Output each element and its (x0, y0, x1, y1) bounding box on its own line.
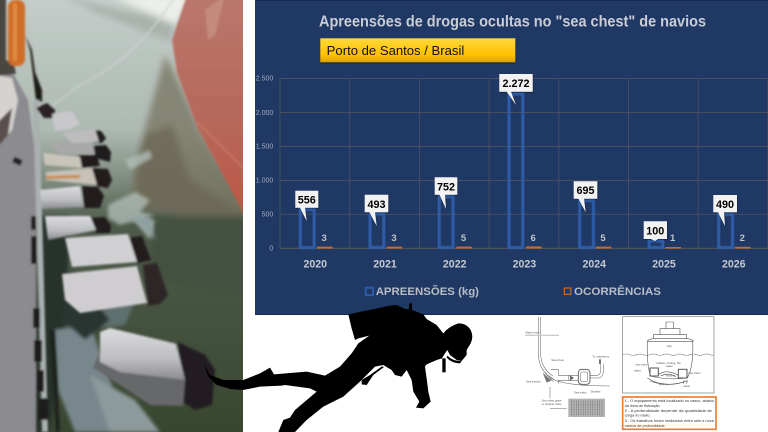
occurrence bars (317, 246, 751, 249)
location banner: Porto de Santos (320, 38, 515, 62)
callout: 100: 100 (646, 225, 664, 237)
ship cross-section diagram: sea chest (688, 371, 701, 375)
ship cross-section diagram (623, 317, 714, 393)
y axis labels: 2.000 (256, 110, 273, 117)
callout: 695 (574, 181, 597, 212)
callout: explanatory notes: da linha de flutuação. (625, 404, 661, 408)
y axis labels: 0 (269, 246, 273, 252)
ship cross-section diagram: water (666, 364, 673, 368)
x axis years: 2020 (304, 258, 327, 270)
callout: 695: 695 (576, 185, 595, 197)
occurrence value labels: 5 (461, 233, 467, 244)
legend: ocorrências: OCORRÊNCIAS (574, 285, 661, 298)
x axis years: 2023 (513, 258, 536, 270)
sea chest schematic diagram: Sea valve (574, 391, 587, 395)
x axis years: 2025 (652, 258, 676, 270)
callout: explanatory notes: 2 - A profundidade depende da quantidade de (625, 409, 712, 413)
x axis years: 2024 (583, 258, 606, 270)
x axis years: 2021 (373, 258, 397, 270)
y axis labels (256, 76, 273, 252)
y axis labels: 500 (262, 212, 273, 218)
callout: 556: 556 (298, 194, 316, 206)
sea chest schematic diagram (525, 317, 610, 417)
callout: explanatory notes: metros de profundidade. (625, 424, 666, 428)
legend: apreensões: APREENSÕES (kg) (376, 285, 479, 298)
sea chest schematic diagram: or strainer plate (542, 402, 562, 406)
seizure bars (kg) (300, 94, 732, 248)
callout: 493: 493 (367, 199, 386, 211)
callout: 752: 752 (437, 182, 455, 194)
callout: 2.272 (499, 74, 533, 105)
callout: explanatory notes: carga no navio. (625, 414, 651, 418)
ship cross-section diagram: water (634, 368, 641, 372)
chart title: Apreensões de drogas ocultas no "sea chest" de navios (319, 14, 706, 30)
sea chest schematic diagram: Sea suction (526, 379, 541, 383)
location banner: Porto de Santos: Porto de Santos / Brasil (327, 44, 464, 58)
ship cross-section diagram: strainer (666, 373, 675, 377)
occurrence value labels (322, 233, 745, 244)
diver silhouette (204, 303, 472, 432)
sea chest schematic diagram: Strainer (591, 389, 601, 393)
callout: 2.272: 2.272 (502, 78, 530, 90)
callout: 490 (713, 195, 737, 226)
callout: 556 (295, 191, 318, 221)
occurrence value labels: 5 (600, 233, 606, 244)
y axis labels: 2.500 (256, 76, 273, 82)
callout: 490: 490 (716, 199, 734, 211)
callout: explanatory notes (623, 397, 716, 429)
x axis years (304, 258, 746, 270)
x axis years: 2022 (443, 258, 467, 270)
occurrence value labels: 3 (322, 233, 327, 244)
callout: 493 (365, 195, 388, 226)
sea chest schematic diagram: Water level (525, 331, 540, 335)
ship cross-section diagram: sea chest (635, 362, 648, 366)
y axis labels: 1.500 (256, 144, 273, 150)
x axis years: 2026 (722, 258, 746, 270)
ship cross-section diagram: gallery (659, 382, 668, 386)
y axis labels: 1.000 (256, 178, 273, 184)
ship cross-section diagram: ship (667, 344, 672, 348)
occurrence value labels: 3 (391, 233, 397, 244)
callout: 752 (435, 177, 457, 209)
occurrence value labels: 2 (740, 233, 745, 244)
ship cross-section diagram: water (683, 384, 690, 388)
sea chest schematic diagram: To machinery (592, 354, 610, 358)
occurrence value labels: 1 (670, 233, 676, 244)
occurrence value labels: 6 (531, 233, 536, 244)
sea chest schematic diagram: Sea chest (551, 358, 564, 362)
ship cross-section diagram: ballast, cooling, fire (657, 361, 681, 365)
callout: explanatory notes: 1 - O equipamento está localizado no casco, abaixo (625, 399, 714, 403)
chart panel: drug seizures (255, 0, 768, 315)
callout: 100 (644, 221, 667, 241)
photo: drug bales attached to ship hull (0, 0, 250, 432)
sea chest schematic diagram: Sea chest grate (542, 398, 562, 402)
callout: explanatory notes: 3 - Os trabalhos foram realizados entre seis e nove (625, 419, 714, 423)
